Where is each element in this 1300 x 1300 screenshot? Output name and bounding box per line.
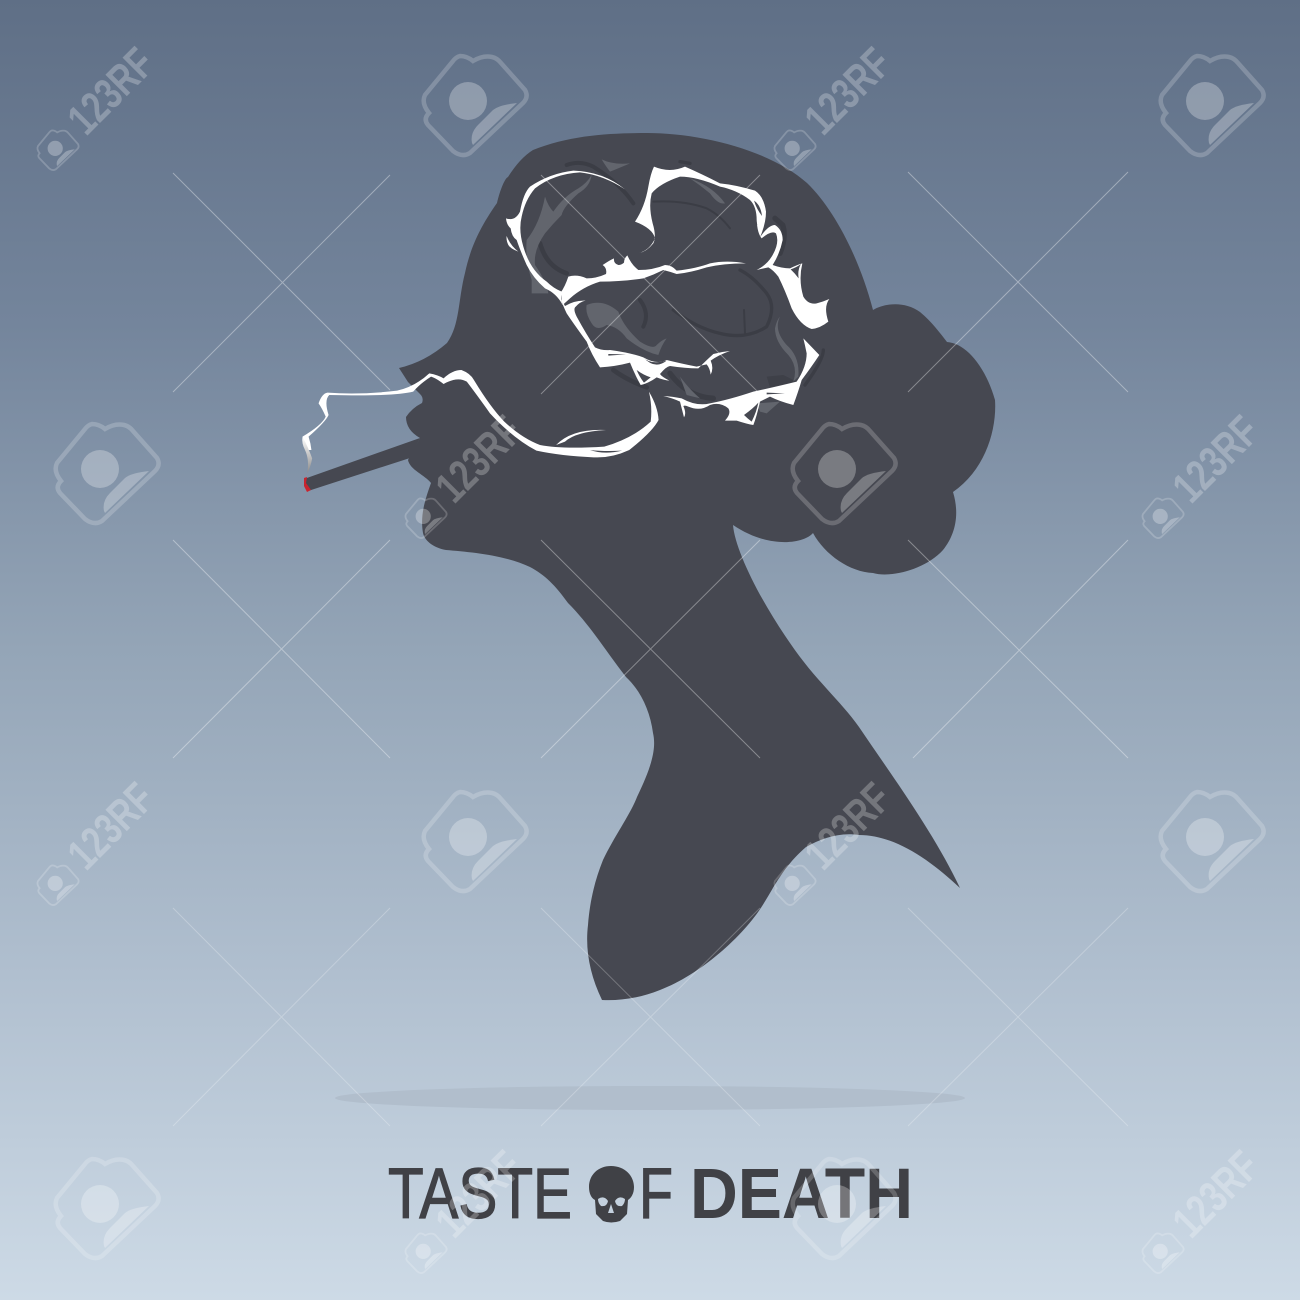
icon: skull replacing the letter O [589,1166,634,1222]
watermark: 123RF text logos: 123RF [795,39,901,144]
white smoke, right lobe [635,167,829,329]
TASTE word: TASTE [388,1155,572,1234]
watermark: 123RF text logos: 123RF [1163,407,1269,512]
cigarette ember [304,477,311,492]
smoke trail from cigarette to skull [302,370,659,473]
floating shadow ellipse [335,1086,965,1110]
smoke shading, lower part [586,270,823,413]
watermark: 123RF text logos: 123RF [58,39,164,144]
smoke shading, upper left part [526,159,633,293]
watermark: 123RF text logos: 123RF [1163,1142,1269,1247]
watermark: 123RF text logos: 123RF [426,1142,532,1247]
smoke shading, upper right part [653,162,784,253]
watermark: 123RF text logos: 123RF [58,774,164,879]
smoke skull drawn in the head [302,159,829,473]
white smoke, lower jaw [561,298,819,425]
woman silhouette in profile [399,133,995,1000]
watermark: 123RF text logos: 123RF [426,407,532,512]
watermark: 123RF text logos: 123RF [795,774,901,879]
watermark cross lines [173,172,1128,1126]
title: TASTE OF DEATH [388,1155,913,1234]
DEATH word: DEATH [690,1155,913,1234]
cigarette [304,438,420,492]
white smoke, left lobe and central band [506,171,746,305]
F letter: F [639,1155,673,1234]
